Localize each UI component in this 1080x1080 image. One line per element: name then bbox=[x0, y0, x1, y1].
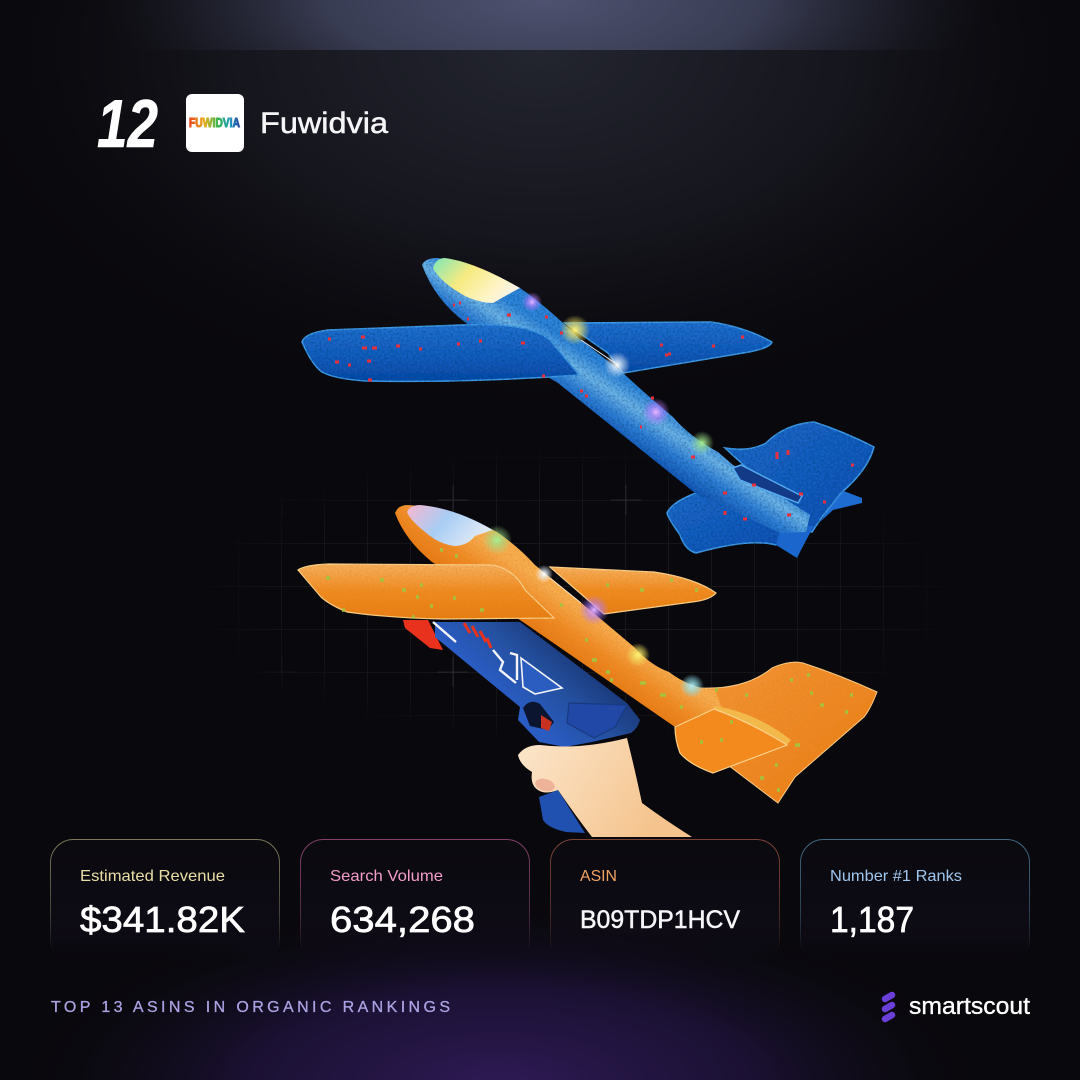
card: number one ranks bbox=[800, 840, 1030, 962]
rank number: 12 bbox=[97, 86, 158, 162]
background grid bbox=[255, 469, 895, 717]
smartscout logo bbox=[885, 993, 1030, 1020]
launcher triangle panel bbox=[521, 658, 562, 694]
orange fuselage bbox=[395, 505, 730, 730]
launcher red ticks bbox=[464, 623, 491, 648]
launcher white markings bbox=[433, 622, 517, 683]
card: search volume: 634,268 bbox=[330, 899, 475, 940]
hand bbox=[518, 738, 692, 837]
orange airplane with launcher and hand bbox=[298, 505, 877, 837]
card: estimated revenue bbox=[50, 840, 280, 962]
brand logo bbox=[186, 94, 244, 152]
card: estimated revenue: Estimated Revenue bbox=[80, 868, 225, 885]
wordmark: smartscout bbox=[909, 993, 1030, 1020]
blue lower fin bbox=[667, 490, 792, 553]
brand name: Fuwidvia bbox=[260, 107, 388, 140]
blue vertical stabilizer bbox=[776, 526, 814, 558]
blue tail slot bbox=[733, 465, 802, 503]
launcher red end bbox=[403, 620, 443, 650]
blue fuselage bbox=[422, 258, 810, 533]
card: search volume bbox=[300, 840, 530, 962]
blue tail fin bbox=[725, 422, 874, 532]
brand logo: FUWIDVIA bbox=[189, 115, 240, 130]
orange plane green speckles bbox=[326, 550, 853, 790]
blue plane red speckles bbox=[328, 303, 854, 519]
launcher grip bbox=[539, 790, 585, 833]
orange plane lights bbox=[482, 525, 704, 698]
card: asin: ASIN bbox=[580, 868, 617, 885]
launcher panel outline bbox=[567, 703, 627, 738]
blue far wing bbox=[565, 322, 772, 373]
orange far wing bbox=[550, 567, 716, 614]
orange nose light bbox=[407, 505, 493, 546]
blue wing seam highlight bbox=[581, 340, 615, 363]
launcher trigger bbox=[523, 702, 554, 730]
blue nose light bbox=[433, 258, 520, 303]
blue plane lights bbox=[522, 292, 714, 455]
card: asin: B09TDP1HCV bbox=[580, 906, 740, 934]
blue near wing bbox=[302, 325, 579, 381]
icon: smartscout mark bbox=[885, 995, 892, 1019]
stat cards bbox=[50, 840, 1030, 962]
launcher body bbox=[435, 622, 640, 747]
orange near wing bbox=[298, 564, 554, 619]
card: asin bbox=[550, 840, 780, 962]
card: number one ranks: Number #1 Ranks bbox=[830, 868, 962, 885]
orange wing seam highlight bbox=[550, 578, 581, 603]
blue rear tip bbox=[820, 490, 862, 522]
launcher bbox=[403, 620, 640, 833]
card: number one ranks: 1,187 bbox=[830, 899, 914, 940]
finger bbox=[534, 777, 556, 793]
orange tail plane bbox=[675, 709, 787, 773]
orange tail slot bbox=[714, 706, 791, 746]
blue airplane bbox=[302, 258, 874, 558]
footer caption: TOP 13 ASINS IN ORGANIC RANKINGS bbox=[51, 999, 450, 1016]
card: estimated revenue: $341.82K bbox=[80, 899, 245, 940]
card: search volume: Search Volume bbox=[330, 868, 443, 885]
rear fin bbox=[700, 662, 877, 803]
